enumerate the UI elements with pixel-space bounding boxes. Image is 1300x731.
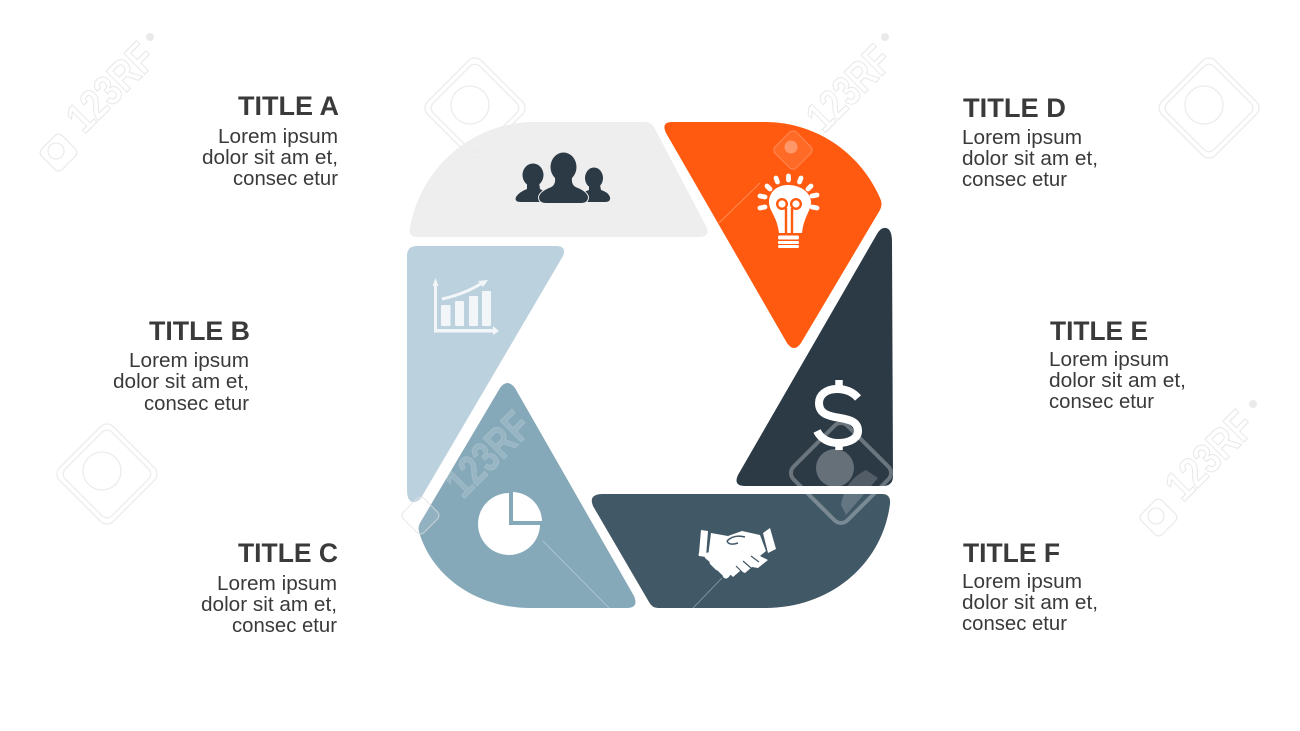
icon: people: [516, 152, 610, 203]
text block: title C: consec etur: [232, 614, 337, 637]
panel: segment D orange: [664, 122, 882, 348]
watermark: 123RF bottom right: 123RF: [1156, 402, 1264, 510]
icon: dollar sign: [817, 380, 858, 450]
text block: title E: consec etur: [1049, 390, 1154, 413]
text block: title F: dolor sit am et,: [962, 591, 1098, 614]
text block: title F: [962, 538, 1098, 635]
watermark: 123RF on teal segment: [400, 402, 541, 536]
watermark: 123RF top left: 123RF: [57, 34, 165, 142]
text block: title B: TITLE B: [149, 316, 250, 346]
text block: title C: [201, 538, 338, 637]
text block: title C: dolor sit am et,: [201, 593, 337, 616]
watermark: 123RF top centre-right: 123RF: [797, 36, 902, 141]
text block: title B: [113, 316, 250, 415]
panel: segment B light blue: [407, 246, 564, 502]
icon: light bulb: [760, 176, 817, 248]
watermark: 123RF top left: [38, 33, 165, 173]
icon: pie chart: [478, 492, 542, 555]
panel: segment F slate: [592, 494, 890, 608]
text block: title D: TITLE D: [963, 93, 1066, 123]
text block: title D: consec etur: [962, 168, 1067, 191]
watermark: stamp top right: [1155, 54, 1263, 162]
text block: title B: dolor sit am et,: [113, 370, 249, 393]
text block: title A: [202, 91, 339, 190]
text block: title F: TITLE F: [963, 538, 1060, 568]
text block: title F: Lorem ipsum: [962, 570, 1082, 593]
text block: title E: Lorem ipsum: [1049, 348, 1169, 371]
text block: title E: dolor sit am et,: [1049, 369, 1186, 392]
text block: title E: [1049, 316, 1186, 413]
text block: title D: dolor sit am et,: [962, 147, 1098, 170]
panel: segment C teal: [418, 383, 635, 608]
text block: title D: Lorem ipsum: [962, 126, 1082, 149]
watermark: stamp over dark segments: [787, 419, 895, 527]
text block: title A: dolor sit am et,: [202, 146, 338, 169]
watermark: stamp left: [53, 420, 161, 528]
watermark: stamp on orange: [772, 129, 814, 171]
text block: title B: Lorem ipsum: [129, 349, 249, 372]
watermark: 123RF bottom right: [1138, 400, 1264, 538]
text block: title F: consec etur: [962, 612, 1067, 635]
text block: title A: consec etur: [233, 167, 338, 190]
panel: segment E dark navy: [737, 228, 893, 486]
text block: title C: TITLE C: [238, 538, 338, 568]
text block: title B: consec etur: [144, 392, 249, 415]
text block: title A: TITLE A: [238, 91, 339, 121]
text block: title A: Lorem ipsum: [218, 125, 338, 148]
icon: growth chart: [432, 278, 499, 335]
icon: handshake: [698, 528, 776, 577]
text block: title D: [962, 93, 1098, 191]
text block: title C: Lorem ipsum: [217, 572, 337, 595]
watermark: 123RF on teal segment: 123RF: [436, 402, 541, 507]
text block: title E: TITLE E: [1050, 316, 1148, 346]
watermark: stamp top centre-left: [421, 54, 529, 162]
panel: segment A grey: [410, 122, 707, 237]
